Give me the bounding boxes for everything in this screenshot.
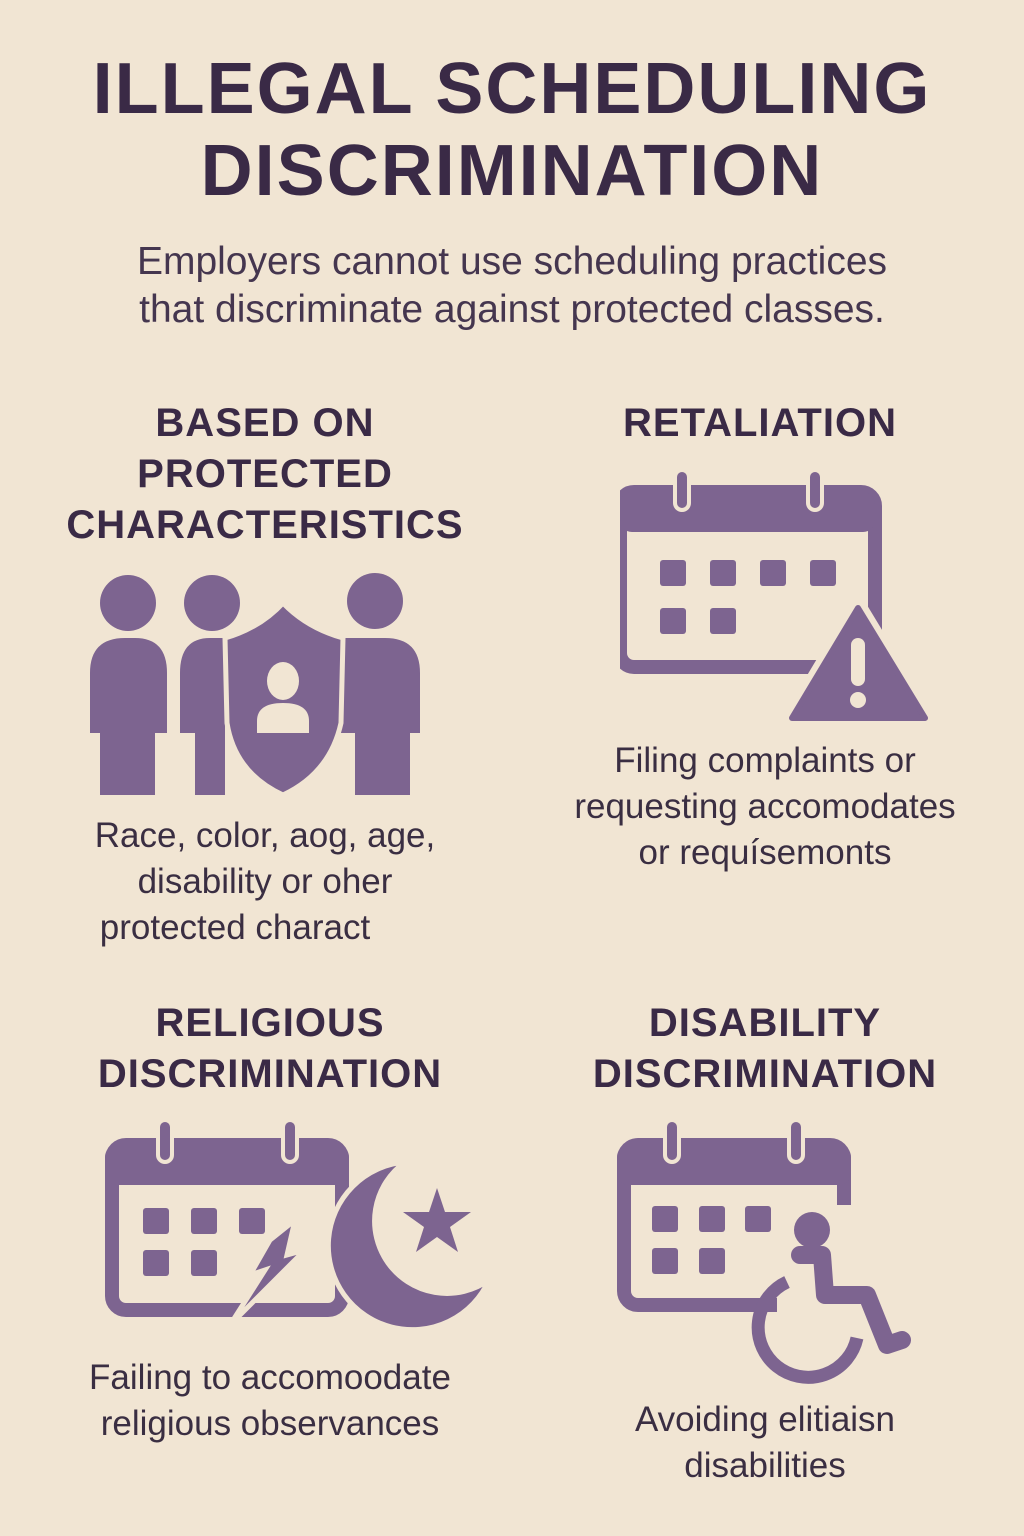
text: disability: Avoiding elitiaisn [635,1400,895,1439]
subtitle: Employers cannot use scheduling practices [137,240,887,283]
text: religious [89,1358,451,1443]
text: disability: disabilities [684,1446,846,1485]
panel: disability discrimination [593,1001,937,1485]
title: ILLEGAL SCHEDULING [93,49,931,129]
heading: protected characteristics: PROTECTED [137,452,393,496]
heading: protected characteristics: CHARACTERISTICS [66,503,464,547]
panel: protected characteristics [66,401,464,947]
text: protected characteristics: disability or oher [138,862,392,901]
heading: religious: RELIGIOUS [155,1001,385,1045]
icon: people with shield [90,573,420,795]
heading: disability: DISABILITY [649,1001,881,1045]
text: retaliation: or requísemonts [639,833,891,872]
subtitle [137,240,887,331]
text: protected characteristics: Race, color, aog, age, [95,816,435,855]
text: religious: religious observances [101,1404,439,1443]
panel: religious discrimination [89,1001,482,1443]
icon: calendar with moon [105,1122,482,1328]
panel: retaliation [574,401,956,872]
icon: calendar with warning [620,472,928,721]
text: protected characteristics: protected charact [100,908,370,947]
icon: calendar with wheelchair [617,1122,911,1384]
text: religious: Failing to accomoodate [89,1358,451,1397]
text: disability [635,1400,895,1485]
subtitle: that discriminate against protected classes. [139,288,885,331]
text: retaliation: Filing complaints or [614,741,916,780]
heading: protected characteristics [66,401,464,547]
title [93,49,931,211]
title: DISCRIMINATION [201,131,823,211]
heading: protected characteristics: BASED ON [155,401,375,445]
heading: religious: DISCRIMINATION [98,1052,442,1096]
heading: religious [98,1001,442,1096]
heading: disability: DISCRIMINATION [593,1052,937,1096]
text: retaliation [574,741,956,872]
text: protected characteristics [95,816,435,947]
text: retaliation: requesting accomodates [574,787,956,826]
heading: disability [593,1001,937,1096]
heading: retaliation: RETALIATION [623,401,897,445]
